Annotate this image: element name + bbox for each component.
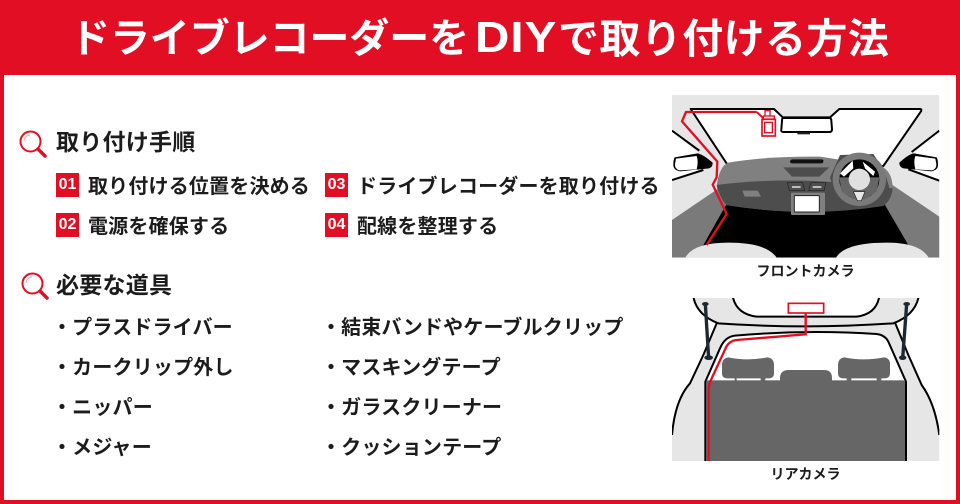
car body — [672, 323, 939, 463]
rear-view mirror — [781, 118, 832, 132]
tools list left: ・カークリップ外し — [52, 351, 234, 380]
icon: magnifier — [20, 130, 47, 158]
dashboard — [717, 157, 893, 212]
rear seat — [706, 380, 905, 462]
caption: rear camera: リアカメラ — [770, 464, 840, 484]
windshield — [691, 109, 921, 166]
center screen — [791, 193, 825, 215]
tools list right: ・結束バンドやケーブルクリップ — [321, 311, 624, 340]
tools list left: ・メジャー — [52, 431, 152, 460]
caption: front camera: フロントカメラ — [756, 261, 854, 281]
steering wheel — [833, 153, 886, 206]
red wiring — [709, 313, 806, 462]
seats — [685, 243, 777, 258]
rear camera — [788, 303, 824, 313]
gas struts — [705, 304, 709, 358]
illustration: rear camera — [672, 298, 940, 461]
side mirrors — [673, 153, 713, 171]
lower side trim — [672, 187, 726, 258]
icon: magnifier — [22, 272, 49, 300]
heading: steps: 取り付け手順 — [56, 123, 196, 157]
title: で取り付ける方法 — [558, 5, 889, 65]
panel: required tools — [22, 266, 624, 460]
side windows — [672, 131, 698, 180]
red wiring — [682, 112, 757, 245]
step 01: 01 — [59, 176, 76, 193]
title — [70, 5, 889, 65]
steering column — [830, 154, 890, 188]
title banner — [0, 0, 960, 75]
title: DIY — [475, 13, 557, 62]
step 02: 電源を確保する — [88, 210, 229, 239]
tools list left: ・ニッパー — [52, 391, 153, 420]
tools list right: ・クッションテープ — [321, 431, 501, 460]
step 04: 04 — [328, 216, 345, 233]
tools list right: ・マスキングテープ — [321, 351, 501, 380]
step 01: 取り付ける位置を決める — [88, 170, 310, 199]
heading: tools: 必要な道具 — [56, 266, 172, 300]
rear opening — [705, 332, 906, 463]
illustration: front camera — [672, 95, 940, 258]
floor — [685, 205, 929, 258]
title: ドライブレコーダーを — [70, 6, 469, 64]
tools list right — [321, 311, 624, 460]
tools list left: ・プラスドライバー — [52, 311, 233, 340]
tailgate — [693, 297, 919, 326]
vents — [787, 183, 805, 191]
step 03: ドライブレコーダーを取り付ける — [357, 170, 660, 199]
headrests — [722, 357, 774, 378]
step 03: 03 — [328, 176, 345, 193]
tools list right: ・ガラスクリーナー — [321, 391, 502, 420]
step 02: 02 — [59, 216, 76, 233]
dashcam — [765, 111, 770, 117]
tools list left — [52, 311, 234, 460]
step 04: 配線を整理する — [357, 210, 498, 239]
panel: installation steps — [20, 123, 660, 239]
